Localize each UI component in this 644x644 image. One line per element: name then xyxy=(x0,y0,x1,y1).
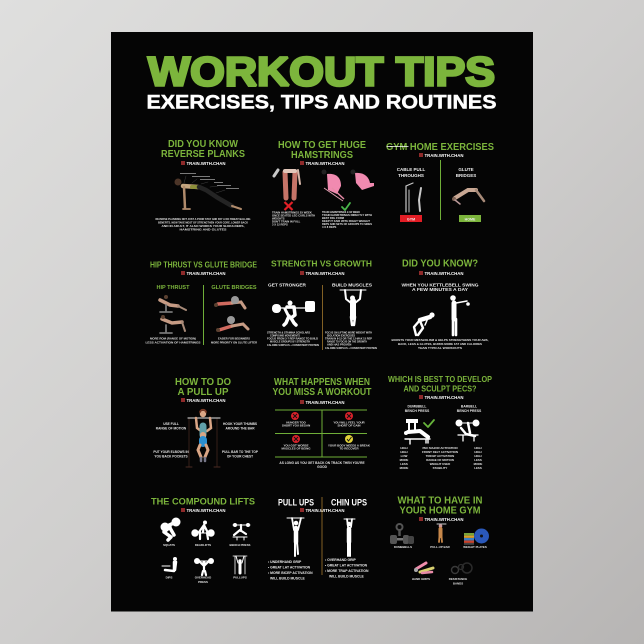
text: cell 2: MUSCLES OF BEING xyxy=(282,446,311,450)
label: cable pull throughs: CABLE PULL xyxy=(397,167,425,172)
left bullets: 3 X 12 REPS xyxy=(272,222,288,226)
handle: TRAIN.WITH.CHAN xyxy=(306,271,344,276)
panel: best for pecs xyxy=(388,374,492,470)
heading: pull ups: PULL UPS xyxy=(278,498,314,508)
left bullets: MUSCLE GROUPS BY STRENGTH xyxy=(270,340,310,344)
panel: home gym xyxy=(390,496,489,586)
heading: the compound lifts: THE COMPOUND LIFTS xyxy=(151,496,255,508)
comparison table: WEIGHT USED xyxy=(430,462,450,466)
chin ups bullets: WILL BUILD MUSCLE xyxy=(329,574,365,578)
divider xyxy=(202,285,204,345)
heading: which is best xyxy=(388,374,492,394)
badge: gym: GYM xyxy=(407,217,415,221)
icon: overhead press xyxy=(194,558,214,575)
comparison table: MORE xyxy=(400,458,408,462)
icon: kettlebell swing top xyxy=(450,295,470,335)
icon: red cross 2 xyxy=(292,435,300,443)
label: build muscles: BUILD MUSCLES xyxy=(332,282,373,288)
note: full range: RANGE OF MOTION xyxy=(156,426,187,430)
handle: TRAIN.WITH.CHAN xyxy=(424,153,464,158)
heading: how to get huge hamstrings xyxy=(278,140,366,161)
heading: chin ups: CHIN UPS xyxy=(331,498,367,508)
heading: what to have in your home gym: WHAT TO HAVE IN xyxy=(398,496,482,506)
panel: compound lifts xyxy=(151,496,255,584)
handle: TRAIN.WITH.CHAN xyxy=(306,508,344,513)
handle: TRAIN.WITH.CHAN xyxy=(186,508,226,513)
text: resistance bands label: BANDS xyxy=(453,582,463,586)
figure: glute bridge top xyxy=(214,296,245,308)
left bullets: COMPOUND MOVEMENTS xyxy=(270,334,300,338)
comparison table xyxy=(400,446,482,470)
icon: pull up silhouette xyxy=(287,518,304,556)
caption: THAN TYPICAL WORKOUTS xyxy=(418,346,462,350)
text: pull ups label: PULLUPS xyxy=(233,576,247,580)
note: hook thumbs xyxy=(223,422,257,430)
comparison table: HIGH xyxy=(474,450,482,454)
figure: reverse plank woman xyxy=(174,176,241,209)
caption: BACK, LEGS & GLUTES, BURNS MORE FAT AND CALORIES xyxy=(398,342,482,346)
text: cell 1 xyxy=(282,420,310,428)
closing text xyxy=(279,461,365,469)
right bullets: BEST RDL FORM xyxy=(322,216,345,220)
comparison table: PEC MAJOR ACTIVATION xyxy=(422,446,458,450)
icon: resistance bands xyxy=(452,563,472,574)
text: resistance bands label: RESISTANCE xyxy=(449,577,467,581)
text: cell 1: SHORT YOU BEGAN xyxy=(282,424,310,428)
handle: TRAIN.WITH.CHAN xyxy=(424,517,464,522)
figure: pink deadlift pose xyxy=(322,170,374,201)
text: cell 4: TO RECOVER xyxy=(339,446,359,450)
right bullets: AND HAS PROVEN xyxy=(327,342,351,346)
caption: AND IN ADULT, IT ALSO WORKS YOUR SHOULDERS, xyxy=(162,224,245,228)
text: cell 4 xyxy=(328,444,371,450)
text: resistance bands label xyxy=(449,577,467,586)
text: weight plates label: WEIGHT PLATES xyxy=(463,545,487,549)
text: dips label: DIPS xyxy=(166,576,172,580)
pull ups bullets: • GREAT LAT ACTIVATION xyxy=(268,566,311,570)
left bullets: TRAIN HAMSTRINGS 2X WEEK xyxy=(272,210,312,214)
right bullets: 4 X 8 REPS xyxy=(322,225,337,229)
chin ups bullets: • OVERHAND GRIP xyxy=(325,558,357,562)
right captions: EASIER FOR BEGINNERS xyxy=(218,336,250,340)
text: cell 4: YOUR BODY NEEDS A BREAK xyxy=(328,444,371,448)
subheading xyxy=(402,282,479,292)
caption: BENEFITS. NOW TAKE MOST OF STRENGTHEN YOUR CORE, LOWER BACK xyxy=(158,220,249,224)
divider xyxy=(440,160,442,220)
panel: reverse planks xyxy=(156,139,251,232)
left bullets: ONCE SEATED LEG CURLS WITH xyxy=(272,214,315,218)
heading: did you know reverse planks: REVERSE PLANKS xyxy=(161,149,245,160)
chin ups bullets: • MORE TRAP ACTIVATION xyxy=(325,569,369,573)
heading: which is best: AND SCULPT PECS? xyxy=(404,384,476,394)
icon: red cross xyxy=(284,202,292,210)
subheading: A FEW MINUTES A DAY xyxy=(412,287,468,292)
subtitle: EXERCISES, TIPS AND ROUTINES xyxy=(146,93,496,114)
comparison table: FRONT DELT ACTIVATION xyxy=(422,450,458,454)
heading: what happens when you miss a workout xyxy=(272,377,372,398)
label: glute bridges: GLUTE BRIDGES xyxy=(211,285,257,291)
left bullets: STRENGTH & STAMINA SCHOLARS xyxy=(267,330,310,334)
icon: dips xyxy=(162,557,177,571)
note: hook thumbs: AROUND THE BAR xyxy=(225,426,255,430)
icon: yellow check xyxy=(345,435,353,443)
heading: how to get huge hamstrings: HOW TO GET HUGE xyxy=(278,140,366,151)
label: dumbbell bench press: BENCH PRESS xyxy=(405,409,430,413)
label: dumbbell bench press xyxy=(405,404,430,413)
text: cell 1: HUNGER TOO xyxy=(286,420,307,424)
label: dumbbell bench press: DUMBBELL xyxy=(407,404,427,408)
heading: did you know: DID YOU KNOW? xyxy=(402,258,478,270)
handle: TRAIN.WITH.CHAN xyxy=(424,271,464,276)
panel: miss a workout xyxy=(272,377,372,469)
left captions xyxy=(146,336,201,344)
heading: how to do a pull up: A PULL UP xyxy=(178,387,229,398)
text: bench press label: BENCH PRESS xyxy=(230,543,251,547)
chin ups bullets: • GREAT LAT ACTIVATION xyxy=(325,564,368,568)
heading: how to do a pull up xyxy=(175,377,231,398)
handle: TRAIN.WITH.CHAN xyxy=(306,161,344,166)
text: overhead press label xyxy=(195,576,211,584)
figure: hip thrust bottom xyxy=(160,315,185,333)
left bullets: CALORIE SURPLUS + CONSISTENT PROTEIN xyxy=(267,343,319,347)
icon: bench press xyxy=(233,523,250,540)
right bullets xyxy=(322,210,372,229)
right bullets: FOCUS ON LIFTING MORE WEIGHT WITH xyxy=(325,330,372,334)
heading: what happens when you miss a workout: YOU MISS A WORKOUT xyxy=(272,387,372,398)
comparison table: STABILITY xyxy=(433,466,447,470)
subheading: WHEN YOU KETTLEBELL SWING xyxy=(402,282,479,288)
note: back pockets: PUT YOUR ELBOWS IN xyxy=(153,450,189,454)
icon: pull-up bar xyxy=(437,524,446,542)
note: pull bar: PULL BAR TO THE TOP xyxy=(222,450,259,454)
figure: pull up woman xyxy=(186,410,220,467)
panel: strength vs growth xyxy=(267,258,377,350)
heading: strength vs growth: STRENGTH VS GROWTH xyxy=(271,258,372,268)
handle: TRAIN.WITH.CHAN xyxy=(306,400,344,405)
heading: how to do a pull up: HOW TO DO xyxy=(175,377,231,388)
text: hand grips label: HAND GRIPS xyxy=(412,577,430,581)
panel: huge hamstrings xyxy=(272,140,374,229)
icon: pull up silhouette xyxy=(340,290,366,325)
icon: green tick xyxy=(424,420,434,427)
left bullets: DON'T TRAIN IN FULL xyxy=(272,220,301,224)
grid lines xyxy=(275,410,367,457)
left captions: MORE ROM (RANGE OF MOTION) xyxy=(150,336,196,340)
label: barbell bench press xyxy=(457,404,482,413)
heading: what happens when you miss a workout: WHAT HAPPENS WHEN xyxy=(274,377,370,388)
right bullets: ISOLATION EXERCISES xyxy=(327,334,355,338)
heading: did you know reverse planks xyxy=(161,139,245,160)
text: cell 3: YOU WILL FEEL YOUR xyxy=(333,420,366,424)
panel: pull ups vs chin ups xyxy=(268,497,369,580)
icon: kettlebell swing bottom xyxy=(414,312,435,335)
right captions: MORE PRIORITY ON GLUTE LIFTER xyxy=(211,340,258,344)
figure: cable machine xyxy=(406,183,421,212)
comparison table: LESS xyxy=(474,466,482,470)
comparison table: HIGH xyxy=(400,450,408,454)
icon: barbell bench silhouette xyxy=(456,420,480,441)
comparison table: LOW xyxy=(401,454,408,458)
right bullets: TRAIN HAMSTRINGS 2-3X WEEK xyxy=(322,210,360,214)
label: glute bridges: GLUTE xyxy=(458,167,474,172)
poster panel xyxy=(111,32,533,612)
right bullets: KEEP IT FAIR WITH RIGHT WEIGHT xyxy=(322,219,370,223)
icon: red cross 1 xyxy=(291,412,299,420)
handle: TRAIN.WITH.CHAN xyxy=(424,395,464,400)
note: full range xyxy=(156,422,187,430)
note: pull bar xyxy=(222,450,259,458)
closing text: AS LONG AS YOU GET BACK ON TRACK THEN YOU'RE xyxy=(279,461,365,465)
left bullets xyxy=(267,330,319,347)
handle: TRAIN.WITH.CHAN xyxy=(186,398,226,403)
right bullets: RANGE TO FOCUS ON THE GROWTH xyxy=(327,340,367,344)
comparison table: MORE xyxy=(400,466,408,470)
label: get stronger: GET STRONGER xyxy=(268,282,307,288)
icon: hand grips xyxy=(414,563,433,573)
panel: hip thrust vs glute bridge xyxy=(146,260,258,345)
comparison table: LESS xyxy=(474,458,482,462)
comparison table: LESS xyxy=(400,462,408,466)
left bullets: FOCUS FROM 3-7 REP RANGE TO BUILD xyxy=(267,336,318,340)
text: dumbbells label: DUMBBELLS xyxy=(394,545,412,549)
text: cell 3: SHORT OF GAIN xyxy=(338,424,360,428)
icon: chin up silhouette xyxy=(344,519,355,556)
caption xyxy=(156,217,251,232)
comparison table: HIGH xyxy=(474,454,482,458)
icon: green tick xyxy=(342,203,350,210)
text: cell 3 xyxy=(333,420,366,428)
note: hook thumbs: HOOK YOUR THUMBS xyxy=(223,422,257,426)
heading: how to get huge hamstrings: HAMSTRINGS xyxy=(291,150,353,161)
note: back pockets xyxy=(153,450,189,458)
figure: hip thrust top xyxy=(160,295,186,312)
caption: BOOSTS YOUR METABOLISM & HELPS STRENGTHENS YOUR ABS, xyxy=(392,338,489,342)
heading: gym home exercises: GYM HOME EXERCISES xyxy=(386,142,494,153)
comparison table: HIGH xyxy=(400,446,408,450)
title: WORKOUT TIPS xyxy=(148,49,495,95)
right bullets: REPS AND SETS OF GROUPS TO SIDES xyxy=(322,222,372,226)
comparison table: RANGE OF MOTION xyxy=(426,458,454,462)
right bullets: CALORIE SURPLUS + CONSISTENT PROTEIN xyxy=(325,346,377,350)
label: barbell bench press: BENCH PRESS xyxy=(457,409,482,413)
divider xyxy=(322,285,324,350)
text: overhead press label: PRESS xyxy=(198,580,208,584)
pull ups bullets: WILL BUILD MUSCLE xyxy=(270,576,306,580)
icon: pull ups xyxy=(233,556,247,574)
note: pull bar: OF YOUR CHEST xyxy=(227,454,253,458)
label: glute bridges: BRIDGES xyxy=(456,173,476,178)
icon: squat silhouette xyxy=(272,300,315,325)
text: deadlifts label: DEADLIFTS xyxy=(195,543,211,547)
note: full range: USE FULL xyxy=(163,422,179,426)
label: glute bridges xyxy=(456,167,476,178)
figure: glute bridge bottom xyxy=(216,316,248,332)
text: overhead press label: OVERHEAD xyxy=(195,576,211,580)
left captions: LESS ACTIVATION OF HAMSTRINGS xyxy=(146,340,201,344)
icon: dumbbell bench silhouette xyxy=(404,419,430,444)
divider xyxy=(321,497,323,575)
right bullets xyxy=(325,330,377,350)
closing text: GOOD xyxy=(317,465,328,469)
heading: what to have in your home gym: YOUR HOME GYM xyxy=(400,506,480,516)
heading: what to have in your home gym xyxy=(398,496,482,516)
left bullets xyxy=(272,210,315,226)
left bullets: WEIGHTS xyxy=(272,216,285,220)
label: cable pull throughs: THROUGHS xyxy=(398,173,424,178)
chin ups bullets xyxy=(325,558,369,578)
comparison table: MORE xyxy=(474,462,482,466)
caption xyxy=(392,338,489,350)
badge: home: HOME xyxy=(465,217,476,221)
pull ups bullets: • MORE BICEP ACTIVATION xyxy=(268,571,313,575)
text: squats label: SQUATS xyxy=(163,543,175,547)
panel: gym home exercises xyxy=(386,142,494,222)
panel: kettlebell did you know xyxy=(392,258,489,350)
note: back pockets: YOU BACK POCKETS xyxy=(154,454,188,458)
right captions xyxy=(211,336,258,344)
label: hip thrust: HIP THRUST xyxy=(157,285,190,291)
text: pull-up bar label: PULL-UP BAR xyxy=(430,545,451,549)
label: cable pull throughs xyxy=(397,167,425,178)
caption: REVERSE PLANKING NOT JUST A POOR STAY AND PAY A NO SWEAT BALLING xyxy=(156,217,251,221)
icon: weight plates xyxy=(464,528,489,545)
icon: deadlifts xyxy=(191,520,215,539)
heading: hip thrust vs glute bridge: HIP THRUST VS GLUTE BRIDGE xyxy=(150,260,258,270)
pull ups bullets: • UNDERHAND GRIP xyxy=(268,560,302,564)
figure: glute bridge xyxy=(452,190,484,204)
icon: squats xyxy=(160,518,180,540)
text: cell 2: YOU GOT WORSE xyxy=(283,444,309,448)
caption: HAMSTRING AND GLUTES xyxy=(180,228,227,232)
heading: did you know reverse planks: DID YOU KNOW xyxy=(168,139,239,150)
anatomy labels xyxy=(180,173,239,189)
right bullets: TRAIN IN 8-12 OR THE 12-MAX 15 REP xyxy=(325,336,372,340)
icon: dumbbells xyxy=(390,524,414,544)
figure: wrong hamstring anatomy xyxy=(274,170,300,198)
panel: how to do a pull up xyxy=(153,377,259,467)
comparison table: TRICEP ACTIVATION xyxy=(426,454,454,458)
comparison table: HIGH xyxy=(474,446,482,450)
handle: TRAIN.WITH.CHAN xyxy=(186,271,226,276)
text: cell 2 xyxy=(282,444,311,450)
pull ups bullets xyxy=(268,560,313,580)
icon: red cross 3 xyxy=(345,412,353,420)
right bullets: TRAIN HAMSTRINGS DIRECTLY WITH xyxy=(322,213,372,217)
label: barbell bench press: BARBELL xyxy=(461,404,477,408)
handle: TRAIN.WITH.CHAN xyxy=(186,161,226,166)
heading: which is best: WHICH IS BEST TO DEVELOP xyxy=(388,374,492,384)
